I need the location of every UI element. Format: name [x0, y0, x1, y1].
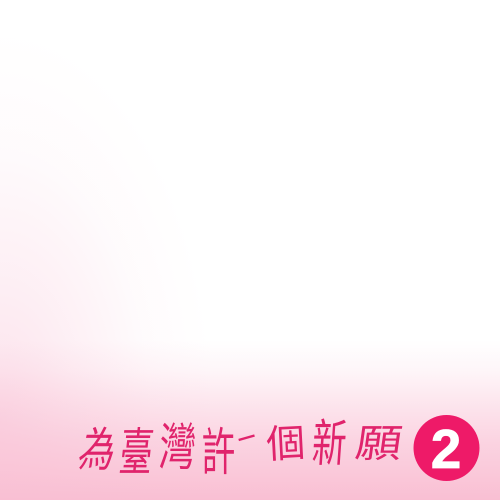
handwritten title: 新: [310, 417, 348, 473]
handwritten title: 許: [202, 425, 235, 482]
number badge: [414, 415, 480, 481]
handwritten title: 為: [73, 424, 122, 477]
badge number: 2: [431, 418, 461, 480]
handwritten title: 臺: [117, 425, 156, 482]
handwritten title: [73, 417, 405, 482]
badge circle: [414, 415, 480, 481]
handwritten title: 願: [353, 422, 405, 466]
handwritten title: 個: [265, 422, 306, 467]
handwritten title: 一: [234, 422, 260, 458]
handwritten title: 灣: [157, 420, 198, 476]
